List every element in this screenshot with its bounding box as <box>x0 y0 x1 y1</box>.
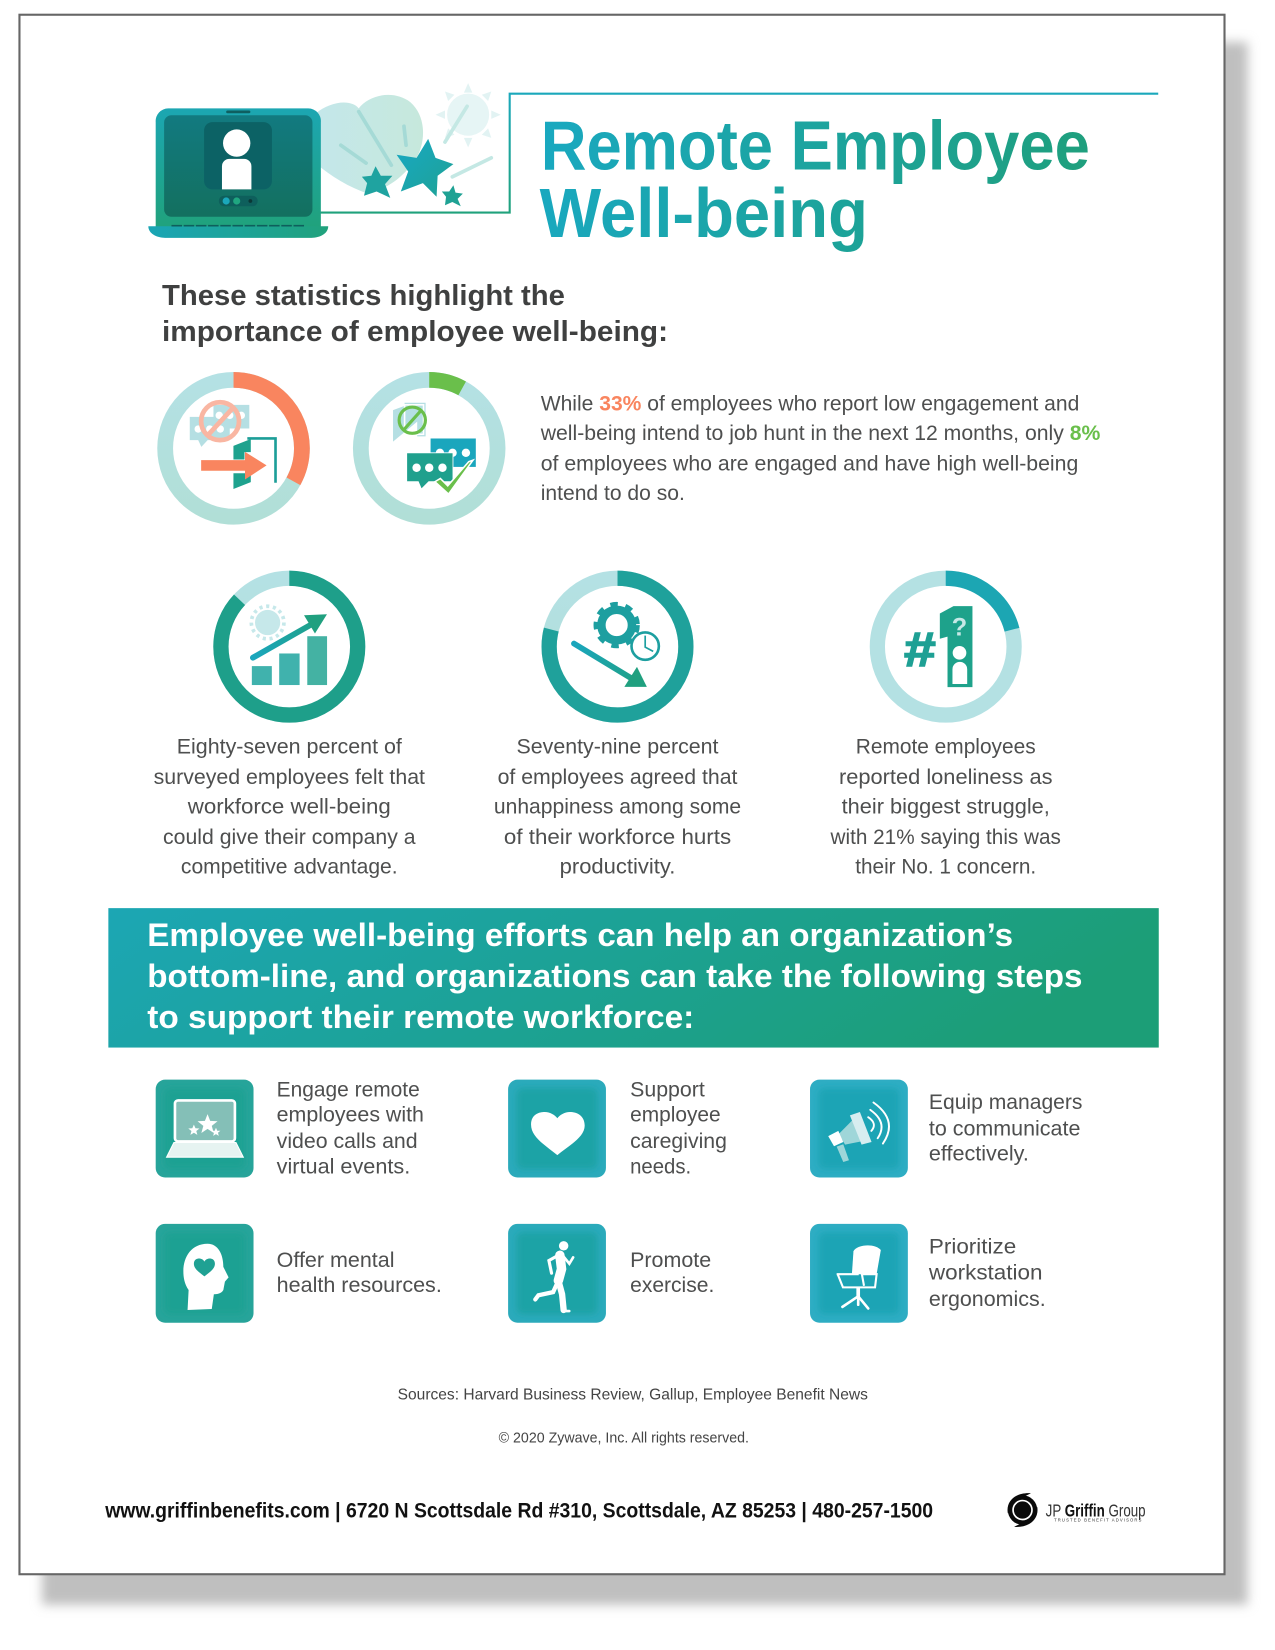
text: 79 percent: of employees agreed that <box>498 766 738 789</box>
text: engage remote employees <box>277 1078 424 1178</box>
text: equip managers <box>929 1091 1082 1166</box>
text: caregiving: needs. <box>630 1155 691 1178</box>
text: mental health: Offer mental <box>277 1249 394 1272</box>
text: caregiving <box>630 1078 727 1178</box>
banner: bottom-line steps: to support their remote workforce: <box>147 998 694 1035</box>
text: loneliness <box>830 735 1061 878</box>
logo: JP Griffin Group <box>1008 1493 1146 1527</box>
banner: bottom-line steps <box>108 908 1159 1048</box>
text: engagement statistic: of employees who are engaged and have high well-being <box>541 452 1078 475</box>
text: ergonomics: Prioritize <box>929 1235 1016 1258</box>
text: engage remote employees: Engage remote <box>277 1078 420 1101</box>
donut: 21 percent loneliness <box>877 578 1014 715</box>
text: 87 percent: Eighty-seven percent of <box>177 735 402 758</box>
icon: celebration shapes behind laptop <box>316 83 501 206</box>
icon tile: laptop with stars <box>156 1080 254 1178</box>
text: engage remote employees: virtual events. <box>277 1155 410 1178</box>
icon tile: megaphone <box>810 1080 908 1178</box>
text: exercise <box>630 1249 714 1297</box>
text: equip managers: Equip managers <box>929 1091 1082 1114</box>
text: ergonomics: workstation <box>928 1262 1043 1285</box>
text: ergonomics <box>928 1235 1046 1311</box>
text: engagement statistic <box>540 392 1101 505</box>
donut: 8 percent job hunting <box>361 380 498 517</box>
text: 79 percent: productivity. <box>560 855 675 878</box>
text: mental health <box>277 1249 442 1297</box>
text: loneliness: reported loneliness as <box>839 766 1053 789</box>
text: 87 percent <box>154 735 425 878</box>
section heading: statistics: importance of employee well-being: <box>162 316 668 348</box>
text: 87 percent: competitive advantage. <box>181 855 398 878</box>
text: 79 percent: of their workforce hurts <box>504 826 731 849</box>
text: engagement statistic: intend to do so. <box>541 482 685 505</box>
text: loneliness: Remote employees <box>856 735 1036 758</box>
title <box>540 106 1090 252</box>
footer contact line: www.griffinbenefits.com | 6720 N Scottsdale Rd #310, Scottsdale, AZ 85253 | 480-257-1500 <box>104 1499 933 1522</box>
text: loneliness: with 21% saying this was <box>830 826 1061 849</box>
logo: JP Griffin Group: JP Griffin Group <box>1046 1500 1146 1520</box>
icon tile: runner <box>508 1224 606 1323</box>
title: Remote Employee <box>541 106 1090 184</box>
text: 79 percent <box>494 735 741 878</box>
banner: bottom-line steps: bottom-line, and organizations can take the following steps <box>147 957 1082 994</box>
text: ergonomics: ergonomics. <box>929 1288 1046 1311</box>
text: engage remote employees: video calls and <box>277 1130 418 1153</box>
text: engage remote employees: employees with <box>277 1104 424 1127</box>
frame line around title <box>316 94 1158 213</box>
donut: 87 percent competitive advantage <box>221 578 358 715</box>
section heading: statistics <box>162 280 668 348</box>
logo: JP Griffin Group: TRUSTED BENEFIT ADVISORS <box>1054 1518 1142 1523</box>
text: 87 percent: surveyed employees felt that <box>154 766 425 789</box>
icon: laptop with video call <box>148 108 328 238</box>
title: Well-being <box>540 174 868 252</box>
text: mental health: health resources. <box>277 1274 442 1297</box>
section heading: statistics: These statistics highlight the <box>162 280 565 312</box>
donut: 21 percent loneliness: ? <box>952 614 967 642</box>
text: caregiving: caregiving <box>630 1130 727 1153</box>
text: 79 percent: unhappiness among some <box>494 795 741 818</box>
text: exercise: Promote <box>630 1249 711 1272</box>
donut: 79 percent productivity <box>549 578 686 715</box>
banner: bottom-line steps: Employee well-being efforts can help an organization’s <box>147 916 1013 953</box>
text: 87 percent: workforce well-being <box>187 795 391 818</box>
text: 87 percent: could give their company a <box>163 826 416 849</box>
icon tile: heart <box>508 1080 606 1178</box>
icon tile: office chair <box>810 1224 908 1323</box>
text: equip managers: effectively. <box>929 1143 1029 1166</box>
text: loneliness: their biggest struggle, <box>842 795 1050 818</box>
text: loneliness: their No. 1 concern. <box>855 855 1036 878</box>
icon tile: head with heart <box>156 1224 254 1323</box>
text: caregiving: Support <box>630 1078 705 1101</box>
text: engagement statistic: well-being intend to job hunt in the next 12 months, only 8% <box>540 422 1101 445</box>
donut: 21 percent loneliness: # <box>904 623 936 677</box>
text: caregiving: employee <box>630 1104 721 1127</box>
text: equip managers: to communicate <box>929 1117 1080 1140</box>
text: 79 percent: Seventy-nine percent <box>517 735 719 758</box>
text: exercise: exercise. <box>630 1274 714 1297</box>
sources: Sources: Harvard Business Review, Gallup, Employee Benefit News <box>398 1387 868 1404</box>
text: engagement statistic: While 33% of employees who report low engagement and <box>541 392 1079 415</box>
donut: 33 percent job hunting <box>165 380 302 517</box>
copyright: © 2020 Zywave, Inc. All rights reserved. <box>499 1431 749 1447</box>
